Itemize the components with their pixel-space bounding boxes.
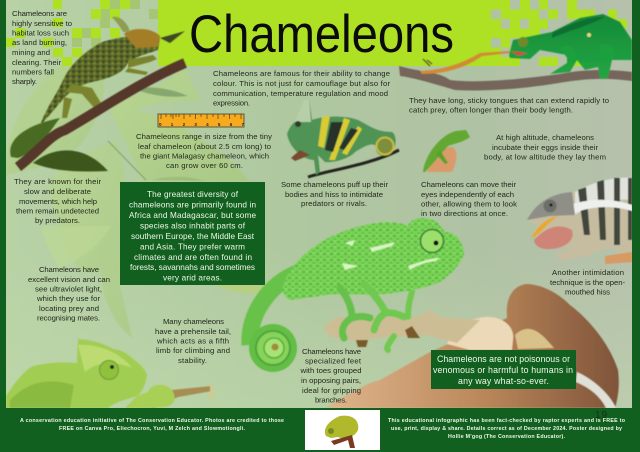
text: habitat loss bbox=[12, 9, 72, 86]
text: size range: Chameleons range in size from the tiny bbox=[136, 132, 272, 141]
text: vision: see ultraviolet light, bbox=[35, 284, 102, 294]
text: specialized feet: specialized feet bbox=[305, 356, 362, 366]
panel: diversity: The greatest diversity of bbox=[147, 190, 239, 199]
text: specialized feet: ideal for gripping bbox=[302, 386, 361, 395]
text: size range: leaf chameleon (about 2.5 cm long) to bbox=[138, 142, 271, 151]
text: prehensile tail: stability. bbox=[178, 356, 207, 365]
text: prehensile tail: have a prehensile tail, bbox=[155, 327, 231, 336]
tongue bbox=[420, 51, 510, 74]
text: colour change bbox=[213, 69, 390, 108]
text: size range bbox=[136, 132, 272, 170]
text: hiss bbox=[550, 268, 625, 296]
text: colour change: colour. This is not just for camouflage but also for bbox=[213, 79, 390, 88]
text: vision: which they use for bbox=[36, 294, 100, 303]
photo: hand holding twig bbox=[325, 284, 619, 408]
panel: not poisonous bbox=[431, 350, 576, 389]
panel: not poisonous: Chameleons are not poisonous or bbox=[437, 354, 570, 364]
text: independent eyes: other, allowing them to look bbox=[421, 200, 517, 208]
throat bbox=[534, 226, 573, 249]
text: size range: the giant Malagasy chameleon, which bbox=[140, 152, 269, 160]
photo: hissing panther chameleon bbox=[527, 178, 632, 264]
text: independent eyes bbox=[421, 180, 517, 218]
pale upper band bbox=[575, 178, 632, 215]
text: vision bbox=[28, 265, 110, 322]
photo: green chameleon catching prey bbox=[399, 14, 632, 91]
branch bbox=[18, 63, 185, 167]
twig bbox=[142, 386, 212, 408]
dark stripes bbox=[578, 178, 632, 245]
text: specialized feet: branches. bbox=[315, 396, 347, 404]
pale stripes bbox=[342, 240, 440, 270]
text: hiss: mouthed hiss bbox=[565, 288, 610, 296]
text: prehensile tail: limb for climbing and bbox=[156, 346, 230, 355]
footer: credits: FREE on Canva Pro, Eliechocron, Yuvi, M Zelch and Slowmotiongli. bbox=[59, 426, 246, 432]
title: Chameleons bbox=[189, 5, 454, 64]
panel: not poisonous: venomous or harmful to humans in bbox=[433, 365, 573, 375]
photo: chameleon on diagonal branch bbox=[10, 17, 185, 171]
chameleon body bbox=[40, 32, 160, 125]
casque and horns bbox=[124, 29, 160, 48]
text: prehensile tail bbox=[155, 317, 231, 365]
lime title band bbox=[5, 0, 627, 66]
text: habitat loss: numbers fall bbox=[12, 68, 54, 76]
text: puff up bbox=[281, 180, 388, 208]
text: slow movement: They are known for their bbox=[14, 177, 101, 186]
text: independent eyes: in two directions at once. bbox=[421, 209, 508, 218]
text: specialized feet bbox=[300, 347, 362, 404]
text: hiss: Another intimidation bbox=[552, 268, 624, 277]
text: tongues: They have long, sticky tongues that can extend rapidly to bbox=[409, 96, 609, 105]
footer: fact-check note: Hollie M'gog (The Conservation Educator). bbox=[448, 434, 566, 440]
legs bbox=[62, 55, 157, 118]
panel: diversity bbox=[120, 182, 265, 285]
text: hiss: technique is the open- bbox=[550, 278, 625, 287]
front legs bbox=[340, 288, 370, 338]
footer: thumbnail poster bbox=[305, 410, 380, 450]
text: slow movement: by predators. bbox=[35, 216, 80, 225]
text: colour change: communication, temperature regulation and mood bbox=[213, 89, 388, 98]
text: habitat loss: clearing. Their bbox=[12, 58, 61, 67]
body bbox=[527, 178, 632, 264]
eye bbox=[100, 360, 118, 380]
leaf cluster on branch bbox=[10, 118, 60, 158]
knot in hand bbox=[515, 329, 554, 349]
text: prehensile tail: which acts as a fifth bbox=[156, 336, 229, 346]
text: habitat loss: Chameleons are bbox=[12, 9, 67, 18]
body bbox=[283, 218, 464, 300]
panel: diversity: southern Europe, the Middle East bbox=[131, 232, 255, 241]
text: puff up: predators or rivals. bbox=[301, 199, 367, 208]
text: tongues: catch prey, often longer than their body length. bbox=[409, 106, 573, 114]
text: vision: locating prey and bbox=[39, 304, 99, 313]
text: colour change: Chameleons are famous for their ability to change bbox=[213, 69, 390, 78]
text: independent eyes: Chameleons can move their bbox=[421, 180, 516, 189]
tail bbox=[250, 272, 300, 345]
photo: chameleon lower left bbox=[6, 339, 213, 408]
chameleon body bbox=[287, 98, 396, 175]
text: habitat loss: as land burning, bbox=[12, 38, 67, 47]
branch bbox=[399, 66, 632, 91]
text: puff up: bodies and hiss to intimidate bbox=[285, 190, 383, 199]
text: slow movement: slow and deliberate bbox=[24, 187, 91, 196]
page number: 19 bbox=[595, 410, 607, 421]
chameleon bbox=[509, 14, 632, 79]
body bbox=[6, 339, 147, 408]
text: specialized feet: Chameleons have bbox=[302, 347, 361, 356]
prey insect bbox=[423, 59, 432, 66]
bracelet bbox=[576, 372, 616, 408]
footer: credits: A conservation education initiative of The Conservation Educator. Photos are credited to those bbox=[20, 418, 284, 424]
text: vision: Chameleons have bbox=[39, 265, 99, 274]
panel: diversity: forests, savannahs and sometimes bbox=[130, 263, 255, 272]
panel: not poisonous: any way what-so-ever. bbox=[458, 376, 549, 386]
panel: diversity: climates and are often found in bbox=[134, 253, 252, 262]
back leg bbox=[387, 292, 412, 350]
text: specialized feet: in opposing pairs, bbox=[301, 376, 361, 385]
text: tongues bbox=[409, 96, 609, 114]
yellow stripes bbox=[318, 116, 362, 160]
text: vision: excellent vision and can bbox=[28, 275, 110, 284]
footer: fact-check note: This educational infographic has been fact-checked by raptor experts and is FREE to bbox=[388, 418, 626, 424]
branch bbox=[308, 150, 399, 177]
background leaves bbox=[6, 45, 268, 338]
text: habitat loss: mining and bbox=[12, 48, 50, 57]
head bbox=[527, 192, 575, 220]
text: vision: recognising mates. bbox=[37, 314, 100, 322]
panel: diversity: species also inhabit parts of bbox=[140, 222, 246, 230]
panel: diversity: very arid areas. bbox=[163, 274, 222, 282]
text: altitude: body, at low altitude they lay them bbox=[484, 152, 606, 162]
text: habitat loss: highly sensitive to bbox=[12, 19, 72, 28]
foot bbox=[125, 385, 175, 408]
text: prehensile tail: Many chameleons bbox=[163, 317, 224, 326]
text: size range: can grow over 60 cm. bbox=[166, 161, 243, 170]
footer: fact-check note: use, print, display & share. Details correct as of December 2024. Poster designed by bbox=[391, 426, 622, 432]
text: slow movement bbox=[14, 177, 101, 225]
photo: small chameleon on fingertip bbox=[423, 130, 470, 172]
photo: veiled chameleon bbox=[287, 98, 399, 177]
thumb bbox=[447, 317, 513, 350]
text: specialized feet: with toes grouped bbox=[300, 366, 362, 375]
text: slow movement: movements, which help bbox=[19, 197, 97, 206]
text: altitude: At high altitude, chameleons bbox=[496, 133, 594, 142]
text: independent eyes: eyes independently of each bbox=[421, 190, 514, 199]
text: colour change: expression. bbox=[213, 98, 250, 108]
open mouth bbox=[531, 216, 558, 238]
panel: diversity: chameleons are primarily found in bbox=[129, 200, 256, 210]
text: slow movement: them remain undetected bbox=[16, 206, 99, 216]
panel: diversity: and Asia. They prefer warm bbox=[140, 242, 245, 252]
eye bbox=[420, 230, 444, 252]
tail curl bbox=[376, 138, 394, 154]
branch bbox=[323, 310, 480, 343]
panel: diversity: Africa and Madagascar, but some bbox=[129, 211, 256, 220]
text: altitude: incubate their eggs inside their bbox=[492, 143, 598, 152]
footer: fact-check note bbox=[388, 418, 626, 440]
icon: ruler bbox=[158, 114, 244, 127]
text: puff up: Some chameleons puff up their bbox=[281, 180, 388, 189]
footer: credits bbox=[20, 418, 284, 432]
photo: large green chameleon bbox=[249, 218, 480, 372]
text: altitude bbox=[484, 133, 606, 162]
text: habitat loss: sharply. bbox=[12, 77, 37, 86]
casque bbox=[295, 98, 311, 122]
icon: ruler: 0 1 2 3 4 5 6 7 bbox=[159, 122, 244, 127]
text: habitat loss: habitat loss such bbox=[12, 28, 69, 38]
